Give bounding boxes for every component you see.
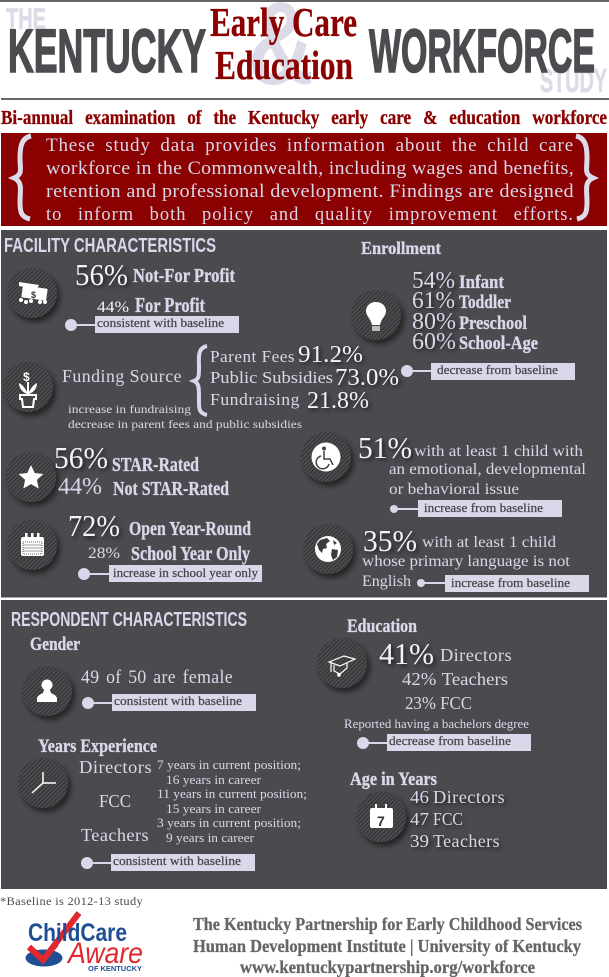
enrollment stats: Preschool: [459, 313, 527, 334]
icon: person: [22, 666, 72, 716]
age stats: [410, 787, 505, 851]
callout: increase from baseline: increase from baseline: [424, 501, 543, 515]
emotional issue stat: with at least 1 child with: [414, 443, 583, 460]
open year stats: [68, 508, 251, 565]
icon: light bulb: [351, 290, 401, 340]
years experience table: 15 years in career: [166, 802, 262, 816]
title: THE: [6, 3, 46, 36]
callout: consistent with baseline: consistent with baseline: [114, 694, 242, 708]
age stats: 46: [410, 787, 429, 807]
icon: calendar 7: 7: [377, 813, 385, 829]
emotional issue stat: an emotional, developmental: [389, 461, 586, 478]
funding source: Funding Source: [62, 366, 182, 386]
enrollment stats: 80%: [412, 309, 456, 335]
panel: intro: [1, 133, 607, 226]
age stats: Directors: [433, 787, 505, 807]
years experience table: 7 years in current position;: [157, 758, 301, 772]
gender stat: 49 of 50 are female: [81, 667, 233, 688]
icon: graduation cap: [317, 638, 367, 688]
footnote: *Baseline is 2012-13 study: [0, 894, 143, 908]
age stats: FCC: [433, 809, 463, 829]
intro text: to inform both policy and quality improvement efforts.: [46, 205, 574, 225]
star rating stats: 44%: [58, 474, 102, 500]
callout: increase from baseline: [390, 500, 562, 517]
footer credits: Human Development Institute | University of Kentucky: [193, 936, 581, 956]
footer credits: www.kentuckypartnership.org/workforce: [240, 957, 535, 977]
open year stats: 28%: [88, 545, 120, 562]
language stat: [362, 523, 571, 590]
funding source: [62, 342, 399, 431]
panel: respondent background: [1, 600, 607, 889]
icon: globe: [303, 524, 353, 574]
intro text: workforce in the Commonwealth, including wages and benefits,: [46, 159, 574, 179]
enrollment stats: Infant: [459, 272, 505, 293]
heading: education: Education: [347, 616, 417, 637]
callout: consistent with baseline: [65, 316, 239, 333]
footer credits: [193, 914, 582, 977]
years experience table: 3 years in current position;: [157, 816, 301, 830]
funding labels: [210, 347, 333, 409]
language stat: English: [362, 573, 411, 590]
for profit stats: 56%: [75, 257, 128, 292]
logo: Child Care Aware of Kentucky: OF KENTUCKY: [88, 964, 142, 973]
star rating stats: [54, 440, 229, 500]
age stats: Teachers: [433, 831, 500, 851]
funding note: decrease in parent fees and public subsidies: [68, 417, 302, 431]
enrollment stats: 60%: [412, 329, 456, 355]
callout: increase from baseline: [417, 575, 589, 592]
open year stats: Open Year-Round: [129, 518, 251, 540]
logo: Child Care Aware of Kentucky: [26, 913, 143, 973]
title: Early Care: [210, 0, 357, 45]
heading: age in years: Age in Years: [350, 769, 437, 790]
callout: decrease from baseline: [401, 363, 575, 380]
callout: decrease from baseline: decrease from baseline: [389, 734, 511, 748]
funding values: [298, 342, 399, 414]
enrollment stats: School-Age: [459, 333, 538, 354]
heading: gender: Gender: [30, 634, 80, 655]
callout: consistent with baseline: [82, 694, 256, 711]
icon: calendar: [7, 520, 57, 570]
age stats: 47: [410, 809, 429, 829]
enrollment stats: [412, 268, 538, 355]
icon: plant: $: [23, 370, 30, 384]
enrollment stats: 61%: [412, 288, 455, 314]
icon: plant: [3, 362, 53, 412]
heading: facility characteristics: FACILITY CHARACTERISTICS: [4, 235, 216, 257]
funding labels: Parent Fees: [210, 347, 295, 366]
language stat: 35%: [363, 523, 417, 558]
callout: consistent with baseline: consistent with baseline: [97, 316, 224, 330]
funding values: 91.2%: [298, 342, 363, 368]
education stats: [344, 636, 529, 731]
years experience table: 11 years in current position;: [157, 787, 307, 801]
funding note: increase in fundraising: [68, 402, 191, 416]
for profit stats: 44%: [97, 299, 129, 316]
callout: consistent with baseline: consistent with baseline: [113, 854, 241, 868]
heading: enrollment: Enrollment: [361, 238, 441, 258]
enrollment stats: Toddler: [459, 292, 511, 313]
heading: years experience: Years Experience: [38, 736, 157, 757]
education stats: 23% FCC: [405, 693, 472, 713]
intro left brace: [14, 136, 31, 219]
funding values: 21.8%: [307, 388, 369, 414]
intro right brace: [576, 136, 593, 219]
emotional issue stat: 51%: [358, 430, 412, 465]
intro text: [46, 136, 574, 225]
open year stats: School Year Only: [131, 543, 250, 565]
open year stats: 72%: [68, 508, 120, 543]
logo: Child Care Aware of Kentucky: Aware: [66, 937, 143, 970]
for profit stats: [75, 257, 235, 317]
callout: increase from baseline: increase from baseline: [451, 576, 570, 590]
intro text: retention and professional development. Findings are designed: [46, 182, 574, 202]
header rules: [0, 0, 609, 100]
callout: increase in school year only: [78, 565, 262, 582]
for profit stats: Not-For Profit: [133, 265, 235, 287]
callout: consistent with baseline: [81, 854, 255, 871]
title: Education: [215, 42, 353, 88]
funding values: 73.0%: [335, 365, 399, 391]
funding labels: Fundraising: [210, 390, 300, 409]
emotional issue stat: or behavioral issue: [389, 481, 519, 498]
star rating stats: STAR-Rated: [112, 454, 199, 476]
callout: decrease from baseline: [357, 734, 531, 751]
icon: money: $: [31, 290, 36, 300]
callout: decrease from baseline: decrease from baseline: [437, 363, 558, 377]
logo: Child Care Aware of Kentucky: ChildCare: [28, 919, 127, 947]
icon: calendar 7: [356, 792, 406, 842]
education stats: Directors: [440, 645, 512, 665]
education stats: 42% Teachers: [402, 669, 508, 689]
star rating stats: 56%: [54, 440, 108, 475]
funding brace: [194, 346, 207, 415]
years experience table: 9 years in career: [166, 831, 255, 845]
funding note: [68, 402, 302, 431]
heading: respondent characteristics: RESPONDENT CHARACTERISTICS: [11, 609, 247, 631]
panel: facility background: [1, 230, 607, 598]
icon: money: [7, 268, 57, 318]
icon: star: [6, 452, 56, 502]
education stats: 41%: [379, 636, 434, 671]
years experience table: FCC: [99, 791, 131, 811]
language stat: whose primary language is not: [362, 553, 571, 570]
title: KENTUCKY: [8, 17, 206, 85]
icon: clock: [18, 758, 68, 808]
icon: wheelchair: [301, 432, 351, 482]
age stats: 39: [410, 831, 429, 851]
years experience table: [79, 757, 307, 845]
for profit stats: For Profit: [135, 293, 205, 317]
education stats: Reported having a bachelors degree: [344, 717, 529, 731]
funding labels: Public Subsidies: [210, 368, 333, 387]
intro text: These study data provides information about the child care: [46, 136, 574, 156]
enrollment stats: 54%: [412, 268, 455, 294]
years experience table: 16 years in career: [166, 773, 262, 787]
callout: increase in school year only: increase in school year only: [113, 566, 259, 580]
star rating stats: Not STAR-Rated: [113, 478, 229, 500]
title: [6, 0, 607, 110]
language stat: with at least 1 child: [422, 534, 556, 551]
emotional issue stat: [358, 430, 586, 498]
years experience table: Directors: [79, 757, 152, 777]
years experience table: Teachers: [81, 825, 149, 845]
